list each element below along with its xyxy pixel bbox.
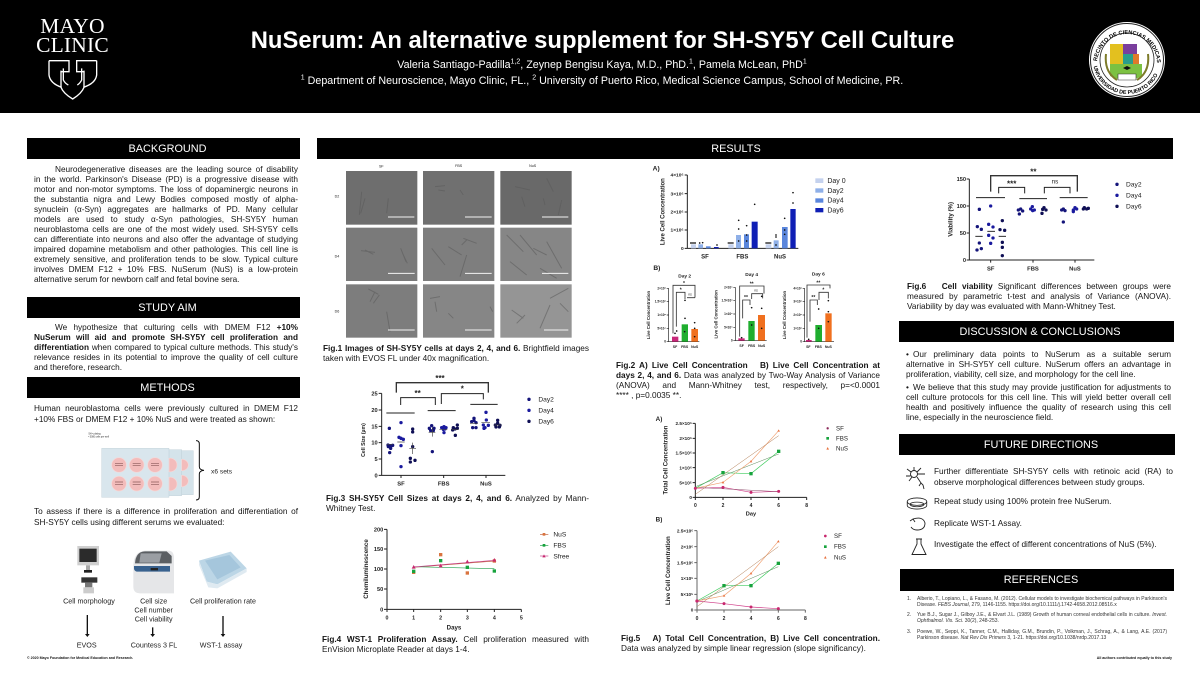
chart: day 6: 2×10⁶: [793, 313, 803, 317]
references list: Yue B.J., Sugar J., Gilboy J.E., & Elvart J.L. (1989) Growth of human corneal endothelial cells in culture. Invest. Ophthalmol. Vis. Sci. 30(2), 248-253.: [917, 612, 1167, 624]
logo: UPR seal: UNIVERSIDAD DE PUERTO RICO: [1094, 66, 1158, 94]
text: background: in the world. Parkinson's Disease (PD) is a progressive disease with: [34, 175, 298, 184]
heading: discussion and conclusions: DISCUSSION & CONCLUSIONS: [960, 326, 1120, 338]
caption: fig 4: [322, 635, 589, 654]
chart: day 4: [713, 272, 767, 348]
chart: day 4: 5×10⁵: [724, 325, 733, 329]
figure 5B: live cell concentration: 2: [723, 616, 726, 622]
figure 5B: live cell concentration: 5×10⁵: [681, 592, 693, 597]
figure 1: micrographs: FBS: [455, 164, 463, 168]
caption: fig 1: taken with EVOS FL under 40x magnification.: [323, 354, 489, 363]
chart: day 6: Live Cell Concentration: [782, 290, 787, 339]
chart: day 2: *: [683, 281, 685, 287]
bullet 2: [906, 383, 1171, 422]
figure 5B: live cell concentration: 1×10⁶: [681, 576, 693, 581]
heading: references: REFERENCES: [1004, 574, 1078, 586]
diagram: culture plates: • 5000 cells per well: [88, 435, 109, 438]
figure 5A: total cell concentration: 5×10⁵: [679, 480, 692, 485]
chart: day 6: 1×10⁶: [793, 326, 803, 330]
chart: day 2: *: [680, 288, 682, 294]
caption: fig 3: Fig.3 SH-SY5Y Cell Sizes at days 2, 4, and 6. Analyzed by Mann-: [326, 494, 589, 503]
figure 4: WST-1 chart: 100: [374, 567, 383, 573]
text: background: [34, 165, 298, 284]
figure 4: WST-1 chart: FBS: [553, 543, 567, 550]
figure 5B: live cell concentration: 8: [804, 616, 807, 622]
figure 6: viability chart: ***: [1007, 180, 1017, 189]
chart: day 6: NuS: [825, 345, 832, 349]
chart: day 4: Live Cell Concentration: [713, 290, 718, 339]
text: background: the substantia nigra and Lewy Bodies composed mostly of alpha-: [34, 195, 298, 204]
text: methods assessment: SH-SY5Y cells using different serums we evaluated:: [34, 518, 224, 527]
figure 5A: total cell concentration: 0: [689, 495, 692, 500]
chart: day 2: NuS: [691, 345, 699, 349]
heading: discussion and conclusions: [899, 321, 1174, 342]
caption: fig 6: [907, 282, 1171, 311]
text: background: involves DMEM F12 + 10% FBS. NuSerum (NuS) is a low-protein: [34, 265, 298, 274]
figure 6: viability chart: [948, 168, 1142, 273]
figure 3: cell size chart: [361, 374, 554, 488]
chart: day 4: 2×10⁶: [724, 285, 733, 289]
figure 1: micrographs: NuS: [529, 164, 537, 168]
chart: day 4: Day 4: [745, 272, 758, 278]
chart: day 6: Day 6: [812, 271, 825, 277]
figure 5B: live cell concentration: NuS: [834, 554, 846, 561]
figure 5A: total cell concentration: 0: [694, 503, 697, 509]
figure 3: cell size chart: **: [415, 389, 422, 398]
heading: background: BACKGROUND: [128, 142, 207, 154]
figure 5A: total cell concentration: 4: [750, 503, 753, 509]
text: background: can differentiate into neurons and also offer the advantage of studying: [34, 235, 298, 244]
figure 5B: live cell concentration: SF: [834, 533, 842, 540]
caption: fig 6: measured by parametric t-test and analysis of Variance (ANOVA).: [907, 292, 1171, 301]
figure 6: viability chart: 50: [960, 231, 966, 237]
text: study aim: We hypothesize that culturing cells with DMEM F12 +10%: [55, 323, 298, 332]
note: author contribution: All authors contributed equally to this study: [1097, 656, 1172, 660]
figure 2B: daily bar charts: [646, 265, 834, 349]
labels and arrows: Cell morphology: [63, 598, 115, 606]
text: FBS: [736, 254, 748, 260]
text: background: models are used to study α-Syn pathologies, SH-SY5Y human: [34, 215, 298, 224]
logo: UPR seal: [1089, 22, 1165, 98]
text: direction 4: Investigate the effect of different concentrations of NuS (5%).: [934, 540, 1157, 549]
heading: methods: [27, 377, 300, 398]
text: background: motor and non-motor symptoms. The loss of dopaminergic neurons in: [34, 185, 298, 194]
caption: fig 6: Fig.6 Cell viability Significant differences between groups were: [907, 282, 1171, 291]
figure 2A: live cell concentration bars: Day4: [827, 198, 844, 205]
figure 4: WST-1 chart: [363, 527, 570, 632]
figure 1: micrographs: D6: [335, 309, 339, 313]
heading: future directions: FUTURE DIRECTIONS: [984, 438, 1098, 450]
caption: fig 2: **** , p=0.0035 **.: [616, 391, 681, 400]
figure 5B: live cell concentration: 2.5×10⁶: [677, 528, 693, 533]
figure 1: micrographs: D2: [335, 194, 339, 198]
bullet 1: [906, 350, 1171, 379]
figure 5A: total cell concentration: 6: [777, 503, 780, 509]
figure 3: cell size chart: Day4: [538, 408, 554, 415]
figure 4: WST-1 chart: 3: [466, 615, 469, 621]
bullet 1: Our preliminary data points to NuSerum as a suitable serum: [913, 350, 1171, 359]
chart: day 2: 2×10⁵: [657, 286, 667, 290]
figure 5A: total cell concentration: Total Cell Concentration: [664, 425, 670, 494]
figure 1: micrographs: D4: [335, 254, 339, 258]
text: SF: [701, 254, 709, 260]
figure 5A: total cell concentration: 2: [722, 503, 725, 509]
chart: day 2: FBS: [681, 345, 689, 349]
figure 5B: live cell concentration: [656, 516, 846, 622]
icon: neuron: [906, 467, 925, 490]
figure 5B: live cell concentration: B): [656, 516, 662, 523]
chart: day 6: FBS: [815, 345, 822, 349]
text: ***: [435, 374, 446, 383]
figure 5B: live cell concentration: 1.5×10⁶: [677, 560, 693, 565]
figure 3: cell size chart: 0: [375, 473, 378, 479]
text: direction 3: Replicate WST-1 Assay.: [934, 519, 1022, 528]
figure 2A: live cell concentration bars: [652, 166, 846, 260]
figure 4: WST-1 chart: NuS: [553, 532, 567, 539]
chart: day 2: [646, 274, 699, 349]
figure 3: cell size chart: 20: [371, 408, 378, 414]
figure 6: viability chart: Viability (%): [948, 202, 955, 237]
diagram: culture plates: x6 sets: [211, 469, 233, 476]
chart: day 6: 0: [800, 340, 802, 344]
text: study aim: relevance resides in its potential to improve the quality of cell culture: [34, 353, 298, 362]
labels and arrows: Cell size: [140, 598, 167, 606]
diagram: culture plates: SH • plating: [88, 432, 101, 435]
bullet 2: health and positively influence the quality of research using this cell: [906, 403, 1171, 412]
figure 5B: live cell concentration: Live Cell Concentration: [665, 536, 672, 605]
figure 5A: total cell concentration: SF: [836, 425, 844, 432]
text: NuS: [774, 254, 786, 260]
figure 5A: total cell concentration: NuS: [836, 445, 848, 452]
figure 6: viability chart: 0: [963, 258, 966, 264]
figure 6: viability chart: 150: [957, 177, 966, 183]
chart: day 2: 5×10⁴: [657, 326, 666, 330]
bullet 1: alternative in SH-SY5Y cell culture. NuSerum offers an advantage in: [906, 360, 1171, 369]
figure 4: WST-1 chart: 2: [439, 615, 442, 621]
chart: day 4: SF: [739, 344, 745, 348]
chart: day 6: **: [816, 280, 820, 286]
figure 3: cell size chart: 5: [375, 457, 378, 463]
caption: fig 5: [621, 634, 880, 653]
logo: Mayo Clinic: [36, 14, 109, 100]
figure 1: micrographs: [334, 164, 572, 338]
chart: day 2: 1×10⁵: [657, 313, 667, 317]
chart: day 4: 1.5×10⁶: [721, 299, 733, 303]
text: background: impaired dopamine metabolism and other pathologies. This cell line is: [34, 245, 298, 254]
figure 5A: total cell concentration: [656, 416, 848, 518]
bullet 2: We believe that this study may provide justification for adjustments to: [913, 383, 1171, 392]
figure 2A: live cell concentration bars: A): [653, 166, 660, 173]
text: background: Neurodegenerative diseases are the leading source of disability: [55, 165, 298, 174]
caption: fig 5: Data was analyzed by simple linear regression (slope significancy).: [621, 644, 866, 653]
figure 4: WST-1 chart: Days: [447, 625, 462, 632]
figure 6: viability chart: 100: [957, 204, 966, 210]
text: direction 1: observe morphological differences between study groups.: [934, 478, 1145, 486]
chart: day 4: ns: [754, 289, 758, 293]
figure 3: cell size chart: FBS: [438, 482, 450, 488]
figure 5A: total cell concentration: Day: [746, 512, 757, 518]
chart: day 6: **: [811, 295, 815, 301]
figure 5A: total cell concentration: 2.5×10⁶: [675, 421, 692, 426]
figure 4: WST-1 chart: Sfree: [553, 553, 570, 560]
text: study aim: and therefore, research.: [34, 363, 122, 372]
caption: fig 1: Fig.1 Images of SH-SY5Y cells at days 2, 4, and 6. Brightfield images: [323, 344, 589, 353]
figure 4: WST-1 chart: 200: [374, 527, 383, 533]
labels and arrows: [63, 598, 256, 650]
figure 3: cell size chart: 25: [371, 391, 378, 397]
text: discussion bullets: [906, 350, 1171, 422]
figure 2A: live cell concentration bars: 3×10⁶: [671, 191, 684, 197]
text: background: synuclein (α-Syn) aggregates are hallmarks of PD. Many cellular: [34, 205, 298, 214]
figure 2B: daily bar charts: B): [653, 265, 660, 272]
bullet 1: •: [906, 350, 909, 359]
chart: day 4: **: [744, 295, 748, 301]
figure 5A: total cell concentration: 8: [805, 503, 808, 509]
bullet 2: line, especially in the neuroscience field.: [906, 413, 1053, 422]
diagram: culture plates: [88, 432, 233, 500]
figure 5A: total cell concentration: 2×10⁶: [679, 436, 692, 441]
chart: day 4: 0: [731, 339, 733, 343]
figure 5A: total cell concentration: A): [656, 416, 662, 423]
chart: day 4: NuS: [758, 344, 766, 348]
chart: day 2: ns: [688, 292, 692, 296]
figure 5B: live cell concentration: 2×10⁶: [681, 544, 693, 549]
icon: microplate: [199, 552, 247, 588]
references list: [907, 596, 1167, 641]
title: NuSerum: An alternative supplement for SH-SY5Y Cell Culture: [251, 27, 954, 54]
text: direction 1: Further differentiate SH-SY5Y cells with retinoic acid (RA) to: [934, 467, 1173, 476]
future directions list: [906, 467, 1173, 555]
text: background: neuroblastoma cells are one of the most widely used. SH-SY5Y cells: [34, 225, 298, 234]
chart: day 2: Day 2: [678, 274, 691, 280]
figure 5B: live cell concentration: 6: [777, 616, 780, 622]
labels and arrows: EVOS: [77, 642, 97, 650]
figure 3: cell size chart: 10: [371, 441, 378, 447]
caption: fig 2: (ANOVA) and Mann-Whitney test, respectively, p=<0.0001: [616, 381, 880, 390]
heading: background: [27, 138, 300, 159]
text: background: extremely sensitive, and proliferation tends to be slow. Typical culture: [34, 255, 298, 264]
icon: Countess cell counter: [133, 551, 174, 593]
figure 3: cell size chart: Day6: [538, 419, 554, 426]
labels and arrows: WST-1 assay: [200, 642, 243, 650]
text: direction 2: Repeat study using 100% protein free NuSerum.: [934, 497, 1111, 506]
text: background: alternative serum for newborn calf and fetal bovine sera.: [34, 275, 239, 284]
text: methods assessment: To assess if there is a difference in proliferation and differentiation of: [34, 507, 298, 516]
text: study aim: [34, 323, 298, 372]
figure 2A: live cell concentration bars: 0: [681, 246, 684, 252]
figure 5A: total cell concentration: 1×10⁶: [679, 465, 692, 470]
caption: fig 2: Fig.2 A) Live Cell Concentration B) Live Cell Concentration at: [616, 361, 880, 370]
chart: day 6: SF: [806, 345, 811, 349]
caption: fig 1: [323, 344, 589, 363]
labels and arrows: Cell proliferation rate: [190, 598, 256, 606]
references list: 2.: [907, 612, 911, 618]
caption: fig 2: [616, 361, 880, 400]
figure 4: WST-1 chart: 0: [386, 615, 389, 621]
figure 4: WST-1 chart: 5: [520, 615, 523, 621]
chart: day 6: [782, 271, 834, 349]
figure 4: WST-1 chart: 150: [374, 547, 383, 553]
figure 3: cell size chart: SF: [397, 482, 405, 488]
caption: fig 5: Fig.5 A) Total Cell Concentration, B) Live Cell concentration.: [621, 634, 880, 643]
text: methods intro: +10% FBS or DMEM F12 + 10% NuS and were treated as shown:: [34, 415, 275, 424]
labels and arrows: Cell number: [134, 607, 174, 615]
figure 2A: live cell concentration bars: 1×10⁶: [671, 228, 684, 234]
text: methods intro: Human neuroblastoma cells were previously cultured in DMEM F12: [34, 404, 298, 413]
figure 3: cell size chart: Day2: [538, 397, 554, 404]
bullet 1: proliferation, viability, cell size, and morphology for the cell line.: [906, 370, 1136, 379]
labels and arrows: Cell viability: [135, 615, 173, 623]
figure 4: WST-1 chart: 1: [412, 615, 415, 621]
figure 2A: live cell concentration bars: 4×10⁶: [671, 173, 684, 179]
chart: day 2: Live Cell Concentration: [646, 290, 651, 339]
figure 4: WST-1 chart: 0: [380, 607, 383, 613]
references list: 3.: [907, 628, 911, 634]
methods workflow: [63, 546, 256, 650]
heading: study aim: [27, 297, 300, 318]
figure 6: viability chart: NuS: [1069, 267, 1081, 273]
authors: Valeria Santiago-Padilla1,2, Zeynep Bengisu Kaya, M.D., PhD.1, Pamela McLean, PhD1: [397, 58, 807, 71]
figure 2A: live cell concentration bars: Day 0: [827, 178, 846, 185]
figure 5B: live cell concentration: 0: [691, 608, 694, 613]
references list: Alberio, T., Lopiano, L., & Fasano, M. (2012). Cellular models to investigate biochemical pathways in Parkinson's Disease. FEBS Journal, 279, 1146-1155. https://doi.org/10.1111/j.1742-4658.2012.08516.x: [917, 596, 1167, 608]
caption: fig 6: Variability by day was evaluated with Mann-Whitney Test.: [907, 302, 1116, 311]
icon: petri dish: [906, 498, 928, 510]
figure 6: viability chart: Day6: [1126, 204, 1142, 211]
logo: Mayo Clinic: MAYO: [40, 14, 105, 38]
icon: microscope: [77, 546, 99, 593]
figure 1: micrographs: SF: [379, 165, 384, 169]
icon: flask: [911, 538, 927, 555]
chart: day 4: 1×10⁶: [724, 312, 733, 316]
figure 3: cell size chart: 15: [371, 424, 378, 430]
figure 2A: live cell concentration bars: Day2: [827, 188, 844, 195]
logo: UPR seal: RECINTO DE CIENCIAS MEDICAS: [1093, 30, 1161, 63]
figure 3: cell size chart: Cell Size (µm): [361, 423, 367, 457]
text: methods intro: [34, 404, 298, 424]
figure 6: viability chart: FBS: [1027, 267, 1039, 273]
figure 2A: live cell concentration bars: Day6: [827, 208, 844, 215]
heading: references: [900, 569, 1174, 591]
figure 5A: total cell concentration: FBS: [836, 435, 848, 442]
chart: day 4: **: [750, 282, 754, 288]
caption: fig 3: [326, 494, 589, 513]
heading: future directions: [899, 434, 1175, 455]
figure 6: viability chart: SF: [987, 267, 995, 273]
figure 6: viability chart: Day2: [1126, 182, 1142, 189]
figure 6: viability chart: **: [1030, 168, 1037, 177]
heading: study aim: STUDY AIM: [138, 302, 197, 314]
text: direction 1: [934, 467, 1173, 486]
caption: fig 4: Fig.4 WST-1 Proliferation Assay. Cell proliferation measured with: [322, 635, 589, 644]
bullet 2: cell culture protocols for this cell line. This will yield better overall cell: [906, 393, 1171, 402]
heading: results: RESULTS: [711, 142, 761, 154]
figure 5B: live cell concentration: 4: [750, 616, 753, 622]
figure 3: cell size chart: NuS: [480, 482, 492, 488]
references list: 1.: [907, 596, 911, 602]
references list: Poewe, W., Seppi, K., Tanner, C.M., Halliday, G.M., Brundin, P., Volkman, J., Schrag, A., & Lang, A.E. (2017) Parkinson disease. Nat Rev Dis Primers 3, 1-21. https://doi.org/10.1038/nrdp.2017.13: [917, 628, 1167, 641]
figure 4: WST-1 chart: 50: [377, 587, 383, 593]
heading: methods: METHODS: [140, 382, 195, 394]
figure 4: WST-1 chart: Chemiluminescence: [363, 539, 370, 599]
figure 4: WST-1 chart: 4: [493, 615, 496, 621]
figure 5A: total cell concentration: 1.5×10⁶: [675, 451, 692, 456]
chart: day 2: 0: [664, 340, 666, 344]
figure 6: viability chart: Day4: [1126, 193, 1142, 200]
chart: day 4: FBS: [748, 344, 756, 348]
text: study aim: NuSerum will aid and promote SH-SY5Y cell proliferation and: [34, 333, 298, 342]
chart: day 6: 4×10⁶: [793, 286, 803, 290]
figure 5B: live cell concentration: 0: [696, 616, 699, 622]
figure 2A: live cell concentration bars: 2×10⁶: [671, 210, 684, 216]
chart: day 6: 3×10⁶: [793, 300, 803, 304]
figure 3: cell size chart: *: [461, 385, 465, 394]
text: study aim: differentiation when compared to typical culture methods. This study's: [34, 343, 298, 352]
figure 2A: live cell concentration bars: Live Cell Concentration: [660, 178, 666, 245]
icon: replicate arrow: [910, 518, 926, 530]
figure 5B: live cell concentration: FBS: [834, 544, 846, 551]
caption: fig 2: days 2, 4, and 6. Data was analyzed by Two-Way Analysis of Variance: [616, 371, 880, 380]
affiliations: 1 Department of Neuroscience, Mayo Clinic, FL., 2 University of Puerto Rico, Medical Science Campus, School of Medicine, PR.: [301, 74, 903, 87]
caption: fig 3: Whitney Test.: [326, 504, 375, 513]
chart: day 6: *: [822, 288, 824, 294]
bullet 2: •: [906, 383, 909, 392]
header banner: [0, 0, 1200, 113]
copyright: © 2020 Mayo Foundation for Medical Education and Research.: [27, 656, 133, 660]
logo: Mayo Clinic: CLINIC: [36, 33, 109, 57]
text: methods assessment: [34, 507, 298, 527]
chart: day 2: 1.5×10⁵: [655, 300, 667, 304]
heading: results: [317, 138, 1173, 159]
chart: day 2: SF: [673, 345, 678, 349]
caption: fig 4: EnVision Microplate Reader at days 1-4.: [322, 645, 470, 654]
figure 6: viability chart: ns: [1052, 178, 1058, 185]
labels and arrows: Countess 3 FL: [131, 642, 177, 650]
